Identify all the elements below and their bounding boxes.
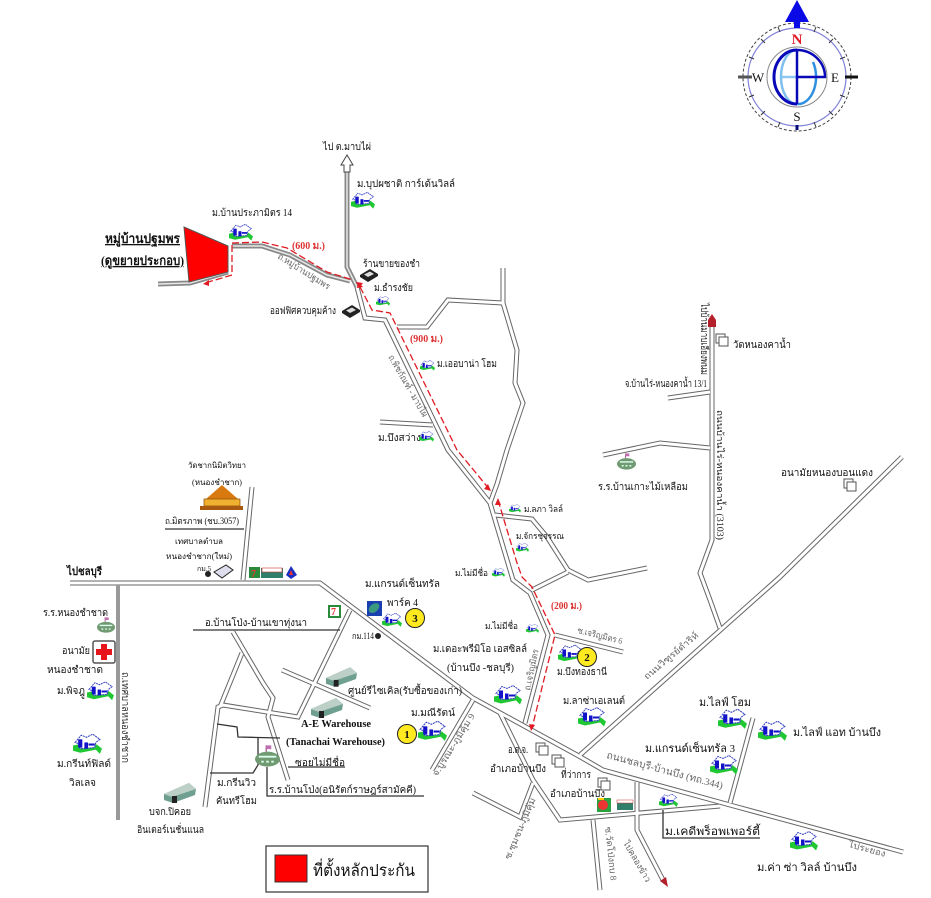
- icon: school: [97, 617, 115, 633]
- icon: recycling warehouse: [326, 667, 357, 687]
- icon: office squares 2: [552, 755, 564, 767]
- label: unnamed soi: ซอยไม่มีชื่อ: [295, 755, 345, 769]
- icon: small house Urbana: [420, 360, 435, 371]
- label: Mittraphap road: ถ.มิตรภาพ (ชบ.3057): [165, 516, 239, 526]
- icon: shops: [249, 566, 297, 580]
- label: km 114: กม.114: [352, 631, 374, 641]
- label: unnamed village 2: ม.ไม่มีชื่อ: [485, 619, 518, 631]
- icon: small house Bueng Sawang: [419, 431, 434, 442]
- icon: 7-Eleven: [328, 605, 341, 618]
- icon: house Bueng Thong: [558, 645, 583, 662]
- label: Country Home: คันทรีโฮม: [216, 794, 257, 807]
- icon: temple: [200, 485, 243, 510]
- route arrowheads: [203, 280, 535, 731]
- road: west side solid road: [116, 585, 120, 820]
- road network: [70, 163, 903, 890]
- icon: house Park 4: [382, 613, 402, 627]
- road name: soi lower: ซ.ชุมชน-ภูมิคุ้ม: [503, 796, 539, 861]
- label: Life Home: ม.ไลฟ์ โฮม: [699, 695, 751, 709]
- icon: municipality building: [205, 565, 233, 578]
- label: Thamrongchai: ม.ธำรงชัย: [374, 283, 413, 294]
- label: unnamed village: ม.ไม่มีชื่อ: [455, 566, 488, 578]
- road name: to north-east: ไปบ้านมาบเอียงพนม: [698, 302, 710, 375]
- icon: km marker: [375, 633, 381, 639]
- icon: health office squares: [844, 479, 856, 491]
- icon: A-E warehouse: [311, 698, 343, 718]
- icon: office squares 1: [536, 743, 548, 755]
- road name: Phichit-Map Phai: ถ.พิชกัณฑ์ - มาบไผ่: [386, 352, 431, 419]
- compass: W: [752, 70, 765, 85]
- label: recycling centre: ศูนย์รีไซเคิล(รับซื้อของเก่า): [348, 683, 462, 697]
- label: tea shop: ร้านขายของชำ: [363, 258, 420, 270]
- label: Green View: ม.กรีนวิว: [217, 777, 256, 789]
- icon: house Phichu: [87, 682, 114, 700]
- icon: small house unnamed: [492, 568, 505, 577]
- label: Life At Ban Bueng: ม.ไลฟ์ แอท บ้านบึง: [793, 726, 881, 739]
- icon: small house unnamed 2: [526, 624, 539, 633]
- label: Green Field: ม.กรีนท์ฟิลด์: [57, 758, 111, 770]
- label: Grand Central 3: ม.แกรนด์เซ็นทรัล 3: [645, 741, 735, 755]
- label: Nong Bon Daeng health: อนามัยหนองบอนแดง: [781, 468, 873, 479]
- label: Casa Ville: ม.ค่า ซ่า วิลล์ บ้านบึง: [757, 861, 857, 874]
- label: Grand Central: ม.แกรนด์เซ็นทรัล: [365, 576, 440, 590]
- icon: house Green Field: [73, 734, 102, 754]
- site: red plot: [184, 227, 228, 282]
- icon: small house Lapa: [509, 504, 521, 513]
- icon: house Life At: [758, 721, 787, 741]
- label: Maneerat: ม.มณีรัตน์: [411, 707, 455, 719]
- label: district office name: อำเภอบ้านบึง: [550, 788, 605, 800]
- icon: bank: [617, 800, 633, 810]
- icon: house La Salle: [578, 708, 606, 726]
- road name: Pathumporn: ถ.หมู่บ้านปฐมพร: [275, 251, 332, 292]
- road name: to Khlong Khao: ไปคลองข้าว: [621, 838, 653, 884]
- label: Urbana Home: ม.เออบาน่า โฮม: [437, 357, 497, 370]
- label: Ban Bueng district: อำเภอบ้านบึง: [490, 763, 546, 775]
- road name: Withun: ถนนวิฑูรย์ดำริห์: [641, 629, 701, 682]
- label: Prapamit 14: ม.บ้านประภามิตร 14: [212, 207, 292, 219]
- icon: school Ban Pong: [255, 745, 280, 767]
- marker: 3: 3: [412, 613, 418, 625]
- red dashed route: [205, 242, 555, 728]
- road name: west road: ถ.เทศบาลหนองชำชาก: [119, 672, 130, 763]
- icon: office: [342, 305, 360, 318]
- distance: 600 m: (600 ม.): [292, 241, 325, 252]
- label: La Salle: ม.ลาซ่าเอเลนต์: [563, 695, 625, 707]
- label: health office name: หนองชำชาด: [47, 665, 103, 676]
- marker: 2: 2: [584, 652, 590, 664]
- icon: tea shop: [360, 269, 378, 282]
- label: district office: ที่ว่าการ: [561, 767, 592, 781]
- icon: house Grand Central 3: [710, 756, 738, 774]
- label: Lapa Ville: ม.ลภา วิลล์: [524, 503, 563, 514]
- label: Wat Nong Ka Nam: วัดหนองคาน้ำ: [733, 337, 791, 351]
- label: A-E Warehouse: A-E Warehouse: [301, 719, 372, 730]
- label: soi Ban Rai: จ.บ้านไร่-หนองคาน้ำ 13/1: [625, 376, 707, 390]
- label: Bueng Sawang: ม.บึงสว่าง: [378, 432, 421, 444]
- icon: school Ko Mai Lueam: [617, 453, 636, 470]
- marker: 3: [406, 608, 424, 628]
- north road arrowhead: [341, 155, 353, 172]
- label: school Ko Mai Lueam: ร.ร.บ้านเกาะไม้เหลือม: [598, 481, 688, 493]
- label: Park 4: พาร์ค 4: [387, 597, 418, 609]
- label: Picoy: บจก.ปิคอย: [149, 807, 191, 818]
- road name: Chonburi-Ban Bueng: ถนนชลบุรี-บ้านบึง (ทถ.344): [605, 749, 724, 792]
- label: school Nong Cham Chak: ร.ร.หนองชำชาด: [43, 608, 108, 619]
- heading: project name: หมู่บ้านปฐมพร: [105, 231, 180, 248]
- label: municipality: เทศบาลตำบล: [175, 537, 223, 546]
- icon: house Casa: [790, 832, 818, 850]
- marker: 1: 1: [404, 729, 410, 741]
- heading: see enlargement: (ดูขยายประกอบ): [101, 253, 184, 269]
- icon: store: [597, 798, 611, 812]
- icon: Picoy warehouse: [164, 783, 196, 803]
- icon: 7-Eleven: 7: [331, 607, 336, 618]
- distance: 900 m: (900 ม.): [410, 334, 443, 345]
- road name: to Rayong: ไประยอง: [846, 839, 887, 859]
- road name: soi 9: จ.บูรณะ-ภูมิคุ้ม 9: [430, 711, 478, 779]
- label: health office: อนามัย: [62, 646, 90, 657]
- icon: temple squares: [716, 334, 728, 346]
- label: KD Property: ม.เคดีพร็อพเพอร์ตี้: [665, 823, 761, 838]
- compass: E: [831, 70, 839, 85]
- icon: house The Premio: [494, 686, 522, 704]
- label: TAO: อ.ต.จ.: [508, 745, 528, 756]
- label: Phichu: ม.พิจฎู: [57, 686, 85, 699]
- thin side lanes: [165, 529, 760, 838]
- road name: Wat Pong: ซ.วัดโป่งกบ 8: [603, 826, 619, 881]
- road name: Ban Rai road: ถนนบ้านไร่-หนองคาน้ำ (3103): [715, 410, 727, 540]
- label: temple: วัดชากนิมิตวิทยา: [188, 461, 246, 470]
- icon: small house KD: [659, 794, 678, 807]
- label: Chakchuwan: ม.จักรชุจรรณ: [516, 531, 564, 542]
- label: Ban Pong school: ร.ร.บ้านโป่ง(อนิรัตก์ราษฎร์สามัคคี): [269, 783, 416, 796]
- compass: S: [793, 109, 801, 124]
- label: The Premio: ม.เดอะพรีมิโอ เอสซิลล์: [433, 642, 527, 655]
- label: office: ออฟฟิศควบคุมค้าง: [270, 305, 336, 317]
- icon: red cross: [93, 641, 115, 663]
- label: Buppachat: ม.บุปผชาติ การ์เด้นวิลล์: [357, 178, 455, 190]
- compass: [738, 0, 858, 131]
- icon: small house Thamrong: [376, 296, 390, 306]
- label: International: อินเตอร์เนชั่นแนล: [137, 822, 204, 836]
- road label: Ban Pong road: อ.บ้านโป่ง-บ้านเขาทุ่งนา: [205, 616, 307, 629]
- label: Tanachai Warehouse: (Tanachai Warehouse): [286, 737, 385, 748]
- legend: [266, 846, 428, 892]
- icon: shops: 7: [251, 569, 256, 580]
- label: municipality name: หนองชำชาก(ใหม่): [166, 552, 232, 561]
- marker: 2: [578, 648, 596, 666]
- icon: house Maneerat: [418, 721, 447, 741]
- legend: ที่ตั้งหลักประกัน: [313, 858, 415, 880]
- road name: Charoenmit 6: ซ.เจริญมิตร 6: [577, 625, 624, 646]
- icon: house Buppachat: [351, 192, 375, 209]
- red end arrows: [660, 314, 716, 887]
- label: km 5: กม.5: [197, 565, 212, 573]
- label: temple sub: (หนองชำชาก): [192, 478, 242, 487]
- label: Village: วิลเลจ: [69, 778, 96, 789]
- icon: office squares 3: [598, 778, 610, 790]
- icon: leaf badge: [367, 601, 382, 616]
- icon: house Life Home: [718, 709, 747, 729]
- icon: small house Chakchuwan: [516, 543, 529, 552]
- label: to Map Phai: ไป ต.มาบไผ่: [322, 141, 371, 153]
- label: to Chonburi: ไปชลบุรี: [65, 564, 102, 579]
- compass: N: [792, 32, 803, 48]
- label: The Premio sub: (บ้านบึง -ชลบุรี): [447, 662, 514, 674]
- distance: 200 m: (200 ม.): [551, 601, 582, 612]
- label: Bueng Thong Thani: ม.บึงทองธานี: [557, 666, 607, 678]
- road name: Charoenmit: ถ.เจริญมิตร: [522, 648, 541, 691]
- icon: house Prapamit: [229, 224, 253, 241]
- marker: 1: [398, 724, 416, 744]
